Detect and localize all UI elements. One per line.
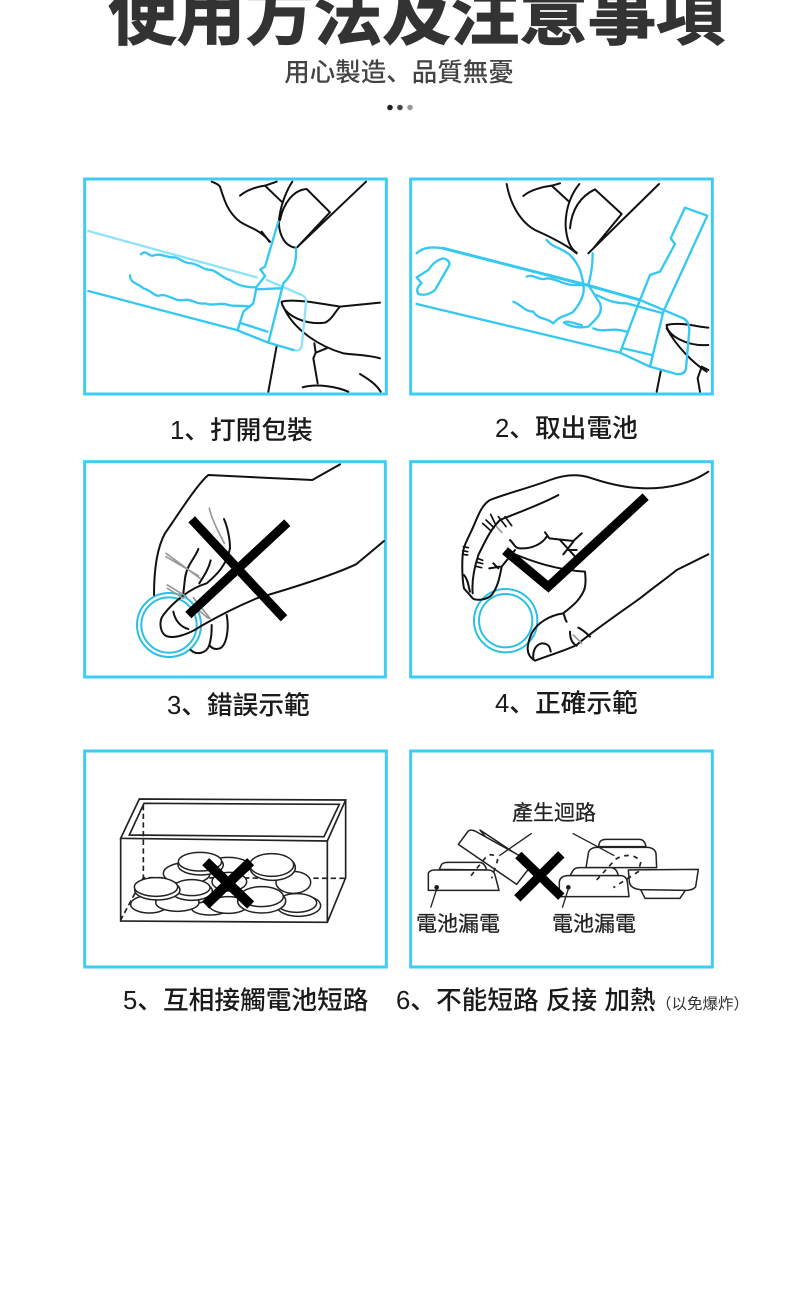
- label: step 6 note: （以免爆炸）: [656, 994, 749, 1013]
- label: step 4: 4、正確示範: [495, 689, 638, 718]
- panel: open package: [85, 179, 386, 394]
- label: circuit note: 產生迴路: [512, 802, 596, 825]
- label: step 5: 5、互相接觸電池短路: [123, 986, 369, 1015]
- icon: hand pulling tab: [212, 182, 381, 392]
- dashed current paths and leader lines: [431, 833, 641, 908]
- icon: battery package: [88, 222, 306, 350]
- icon: hand gripping battery: [154, 464, 384, 653]
- icon: open box: [121, 799, 346, 922]
- label: leak note right: 電池漏電: [552, 913, 636, 936]
- label: step 2: 2、取出電池: [495, 414, 638, 443]
- icon: battery pair left: [428, 830, 532, 890]
- panel: batteries touching in box: [85, 751, 386, 967]
- icon: battery stack right: [559, 839, 698, 898]
- icon: opened package: [417, 208, 707, 374]
- panel: wrong way: [85, 462, 385, 677]
- icon: hand peeling film: [507, 183, 708, 392]
- icon: hand holding battery edge: [462, 472, 708, 661]
- panel: correct way: [411, 462, 712, 677]
- label: step 1: 1、打開包裝: [170, 416, 313, 445]
- label: step 3: 3、錯誤示範: [167, 691, 310, 720]
- label: step 6: 6、不能短路 反接 加熱: [396, 986, 656, 1015]
- icon: cross mark: [206, 862, 251, 905]
- icon: coin batteries: [131, 852, 321, 916]
- subtitle: 用心製造、品質無憂: [284, 59, 514, 87]
- dots: [387, 105, 413, 110]
- icon: cross mark: [188, 519, 287, 618]
- panel: take out battery: [411, 179, 712, 394]
- icon: check mark: [505, 497, 646, 587]
- icon: cross mark: [517, 854, 561, 898]
- panel: short circuit diagram: [411, 751, 712, 967]
- label: leak note left: 電池漏電: [416, 913, 500, 936]
- icon: battery ring: [474, 589, 537, 652]
- icon: battery ring: [137, 593, 201, 657]
